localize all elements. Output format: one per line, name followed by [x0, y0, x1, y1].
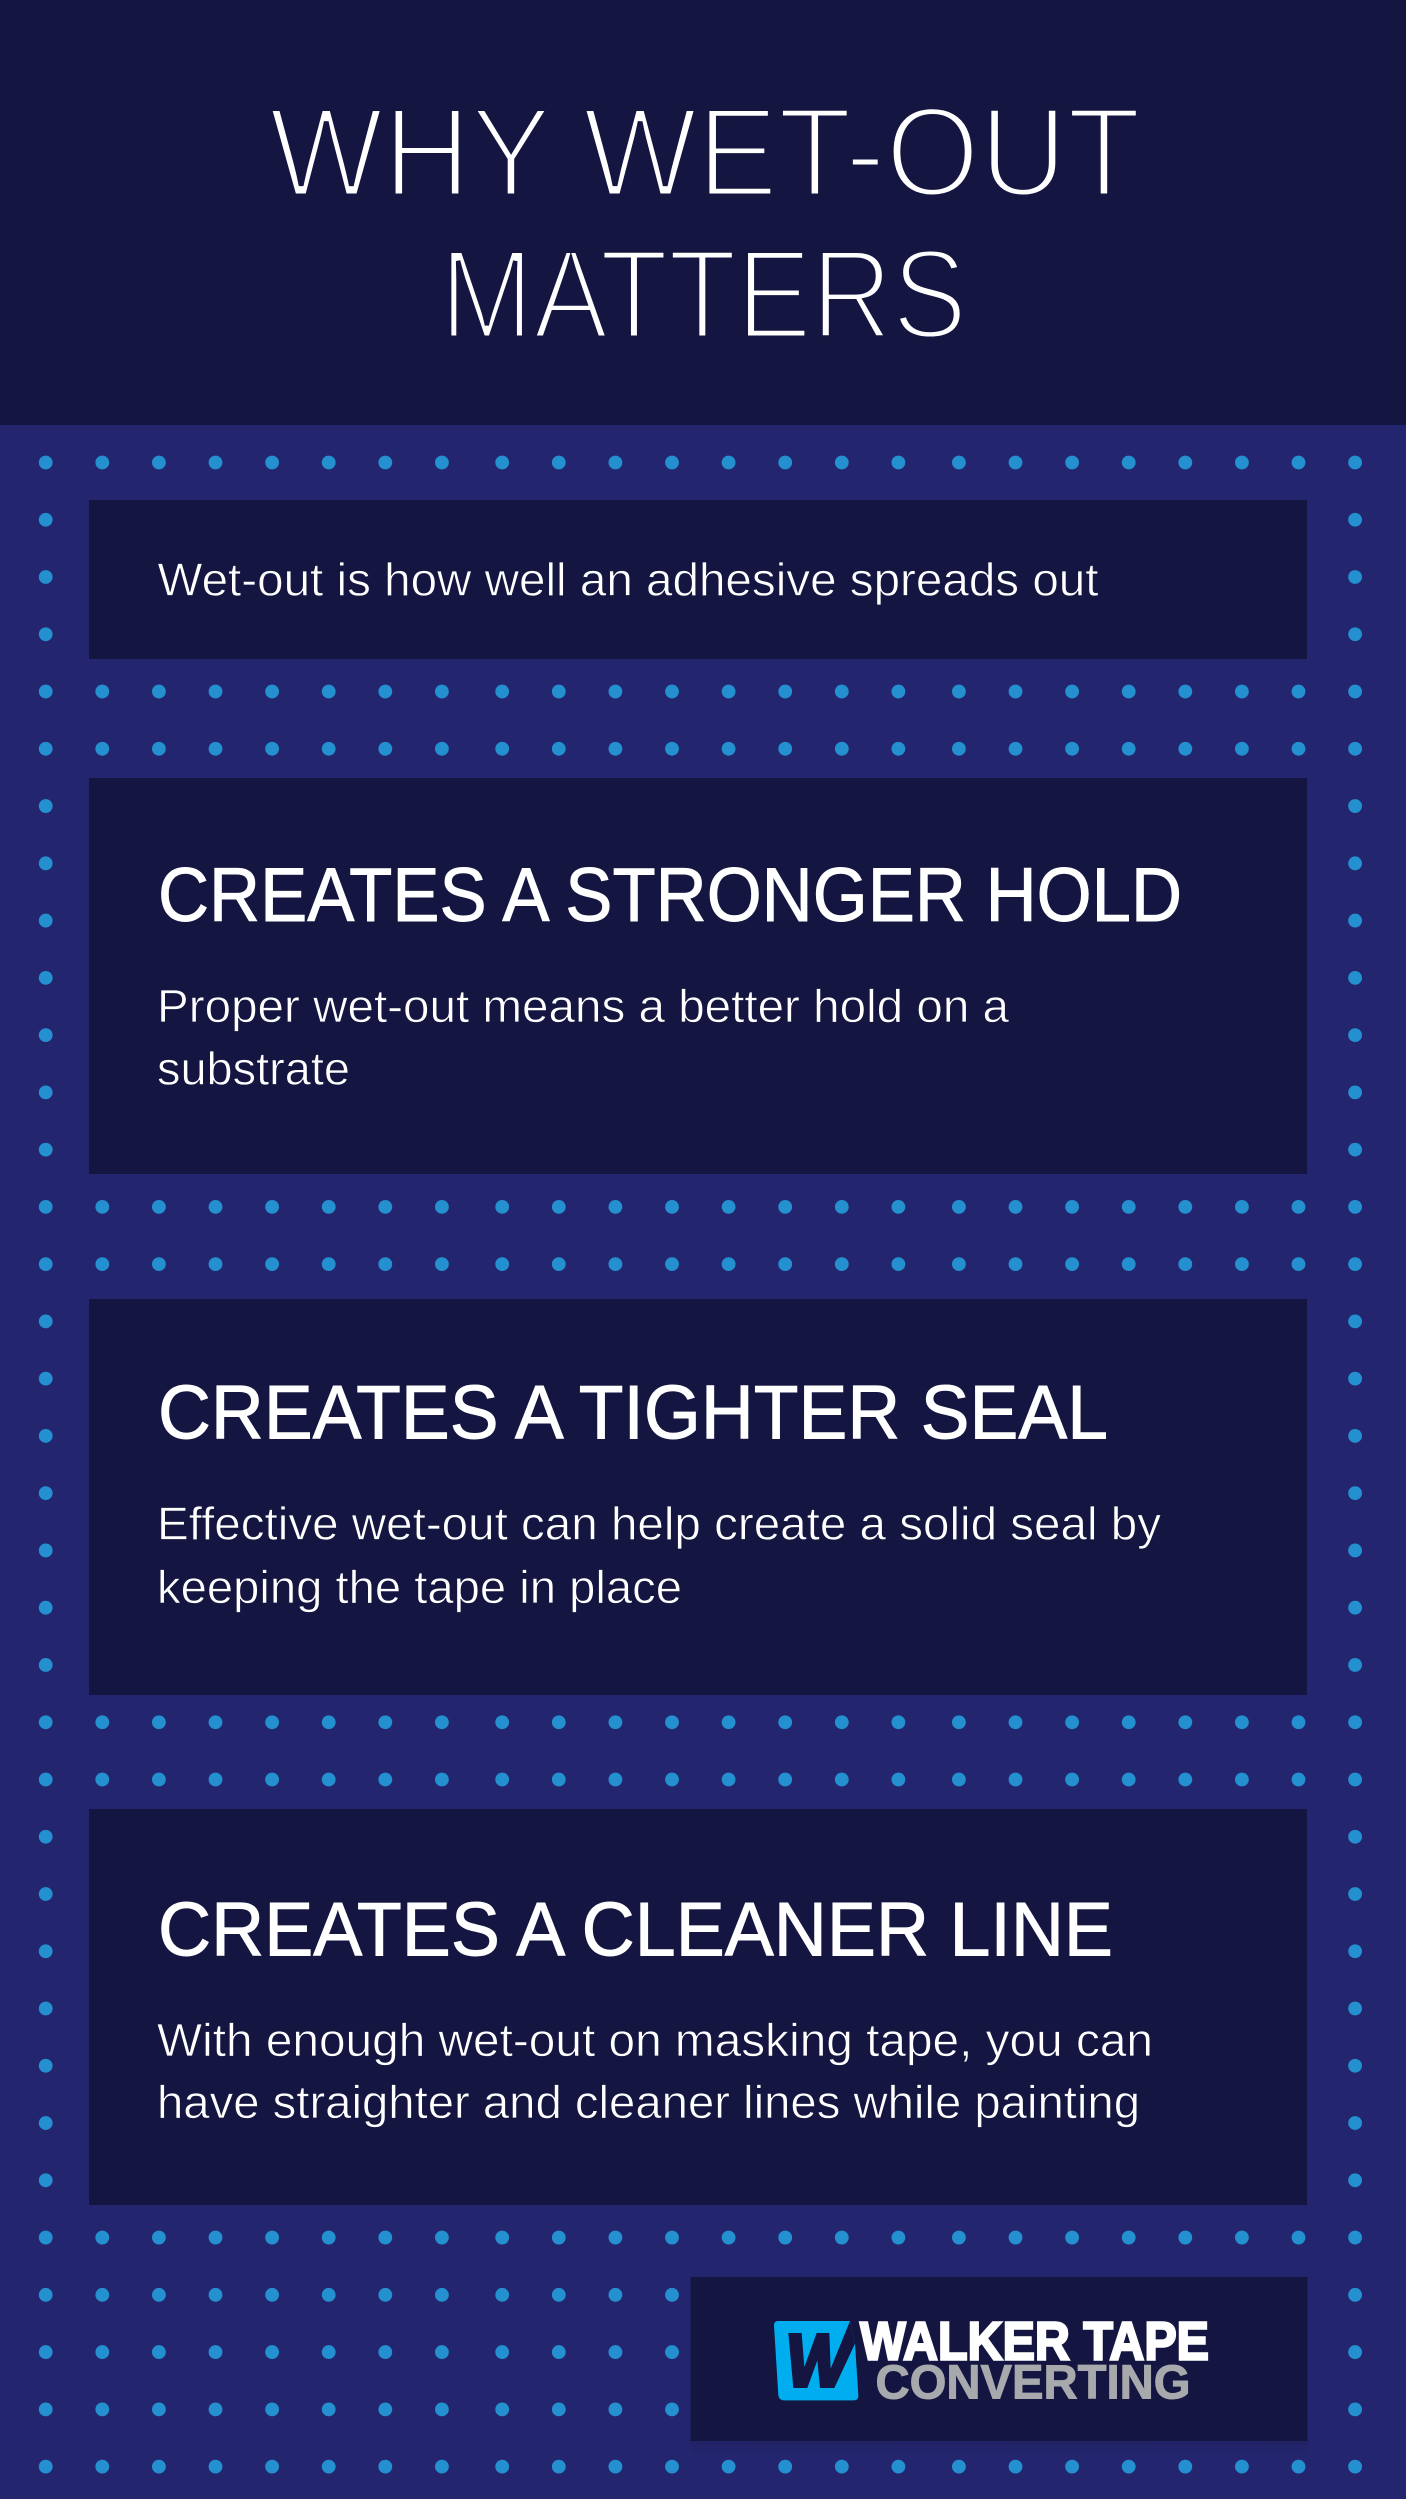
logo wordmark	[860, 2312, 1209, 2410]
heading: stronger hold: CREATES A STRONGER HOLD	[158, 853, 1182, 938]
panel: definition	[89, 500, 1307, 659]
heading: tighter seal: CREATES A TIGHTER SEAL	[158, 1370, 1108, 1456]
definition text: Wet-out is how well an adhesive spreads out	[158, 553, 1099, 605]
panel: tighter seal	[89, 1299, 1307, 1695]
title: WHY WET-OUT	[269, 81, 1141, 223]
body: cleaner line: have straighter and cleaner lines while painting	[157, 2076, 1140, 2128]
body: stronger hold	[157, 980, 1009, 1095]
body: cleaner line: With enough wet-out on masking tape, you can	[157, 2014, 1153, 2066]
body: tighter seal: keeping the tape in place	[157, 1561, 682, 1613]
body: cleaner line	[157, 2014, 1153, 2128]
body: stronger hold: substrate	[157, 1043, 350, 1095]
title	[269, 81, 1141, 365]
panel: logo	[690, 2277, 1308, 2457]
logo wordmark: CONVERTING	[876, 2356, 1190, 2410]
logo wordmark: WALKER TAPE	[860, 2312, 1209, 2372]
heading: cleaner line: CREATES A CLEANER LINE	[158, 1888, 1113, 1972]
body: tighter seal	[157, 1498, 1162, 1613]
body: tighter seal: Effective wet-out can help create a solid seal by	[157, 1498, 1162, 1550]
icon: Walker Tape W mark	[774, 2321, 858, 2400]
panel: cleaner line	[89, 1809, 1307, 2205]
title: MATTERS	[440, 223, 967, 365]
body: stronger hold: Proper wet-out means a better hold on a	[157, 980, 1009, 1032]
header band with title	[0, 0, 1406, 425]
panel: stronger hold	[89, 778, 1307, 1174]
